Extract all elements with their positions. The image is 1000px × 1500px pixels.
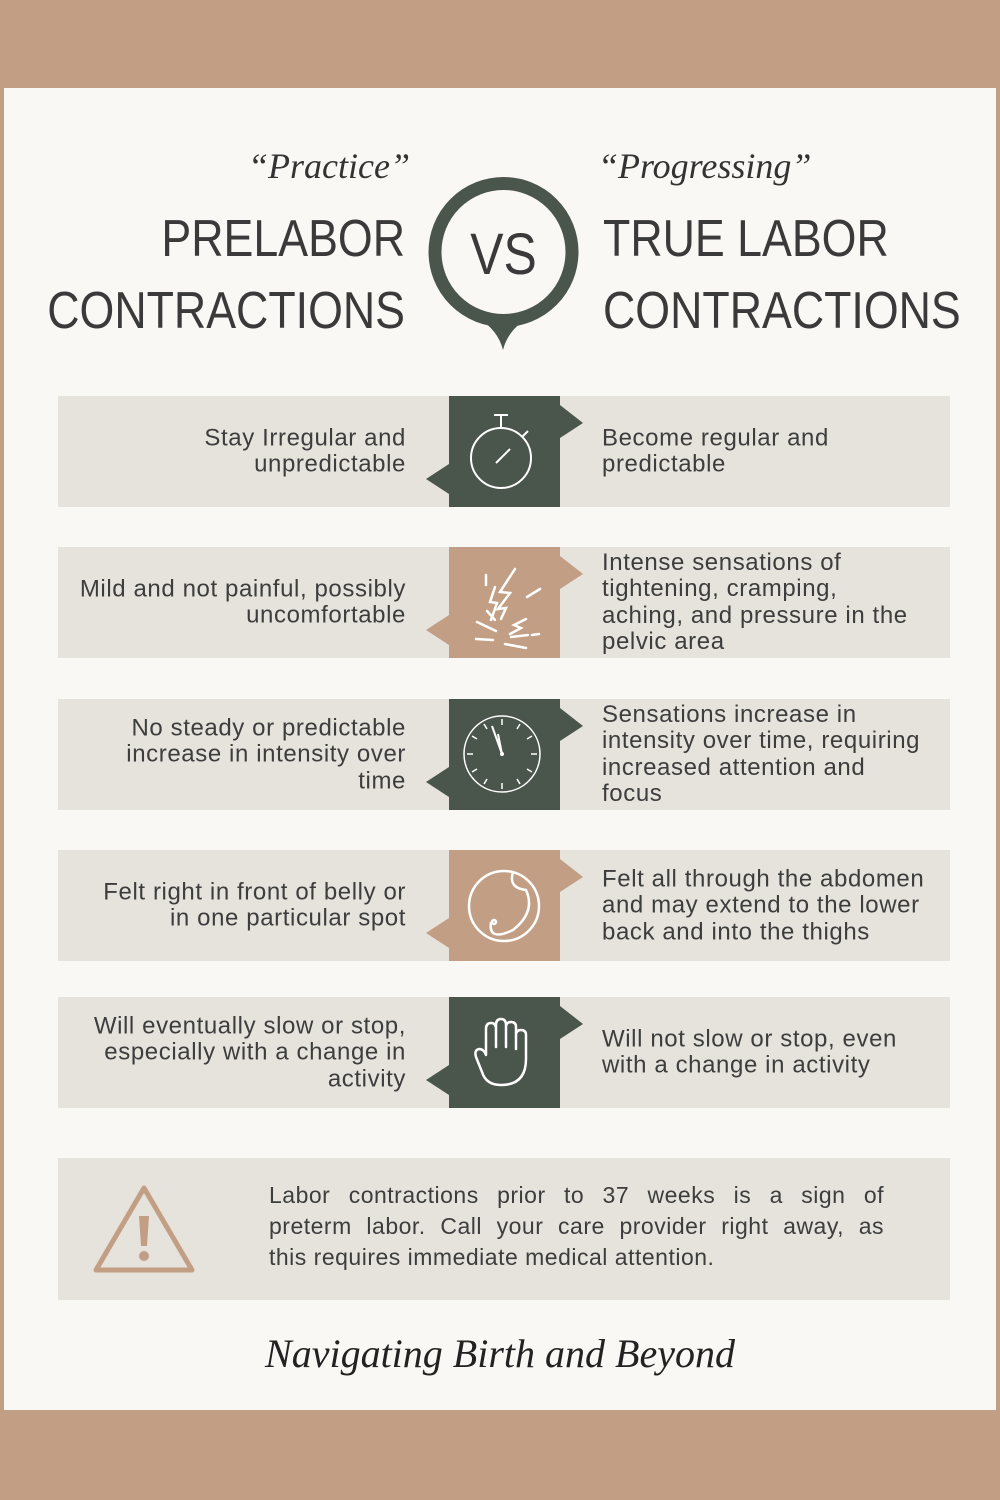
row 2: pelvic area [602, 628, 725, 655]
heading: true labor title: TRUE LABOR [603, 210, 889, 268]
row 1 [58, 396, 950, 507]
row 3: Sensations increase in [602, 700, 857, 728]
heading: prelabor title: CONTRACTIONS [47, 282, 405, 340]
row 5: Will eventually slow or stop, [94, 1012, 406, 1039]
row 5: Will not slow or stop, even [602, 1025, 897, 1052]
row 3: No steady or predictable [131, 714, 406, 741]
footer signature: Navigating Birth and Beyond [265, 1331, 735, 1376]
row 2: tightening, cramping, [602, 575, 837, 602]
row 4: in one particular spot [170, 904, 406, 932]
icon: vs badge: VS [470, 223, 537, 287]
row 3: intensity over time, requiring [602, 727, 920, 754]
row 3 [58, 699, 950, 810]
row 3: time [358, 767, 406, 794]
heading: prelabor title: PRELABOR [161, 210, 405, 268]
heading: true labor title [603, 210, 961, 340]
row 4: back and into the thighs [602, 918, 870, 945]
row 2: aching, and pressure in the [602, 602, 908, 628]
heading: true labor: “Progressing” [598, 146, 811, 186]
warning text: this requires immediate medical attention. [269, 1244, 714, 1270]
icon: stopwatch [426, 396, 583, 507]
heading: prelabor title [47, 210, 405, 340]
row 5: with a change in activity [602, 1052, 870, 1078]
row 3: increase in intensity over [126, 740, 406, 767]
icon: clock [426, 699, 583, 810]
heading: prelabor: “Practice” [248, 146, 410, 186]
row 2: Intense sensations of [602, 548, 841, 576]
icon: burst [426, 547, 583, 658]
row 4 [58, 850, 950, 961]
row 3: increased attention and [602, 754, 865, 780]
row 5 [58, 997, 950, 1108]
row 2 [58, 547, 950, 658]
row 1: Become regular and [602, 424, 829, 451]
row 1: Stay Irregular and [204, 424, 406, 451]
warning panel [58, 1158, 950, 1300]
row 4: Felt right in front of belly or [103, 878, 406, 905]
warning text: Labor contractions prior to 37 weeks is a sign of [269, 1182, 884, 1208]
row 2: Mild and not painful, possibly [80, 575, 406, 602]
row 5: especially with a change in [104, 1038, 406, 1065]
row 4: Felt all through the abdomen [602, 865, 924, 892]
icon: hand [426, 997, 583, 1108]
row 1: predictable [602, 450, 726, 478]
heading: true labor title: CONTRACTIONS [603, 282, 961, 340]
icon: belly [426, 850, 583, 961]
row 4: and may extend to the lower [602, 891, 920, 918]
icon: warning [94, 1186, 194, 1272]
row 2: uncomfortable [246, 602, 406, 628]
warning text: preterm labor. Call your care provider right away, as [269, 1213, 884, 1239]
row 3: focus [602, 780, 662, 807]
row 5: activity [328, 1065, 406, 1092]
warning text [269, 1182, 884, 1270]
row 1: unpredictable [254, 450, 406, 478]
icon: vs badge [428, 177, 578, 350]
